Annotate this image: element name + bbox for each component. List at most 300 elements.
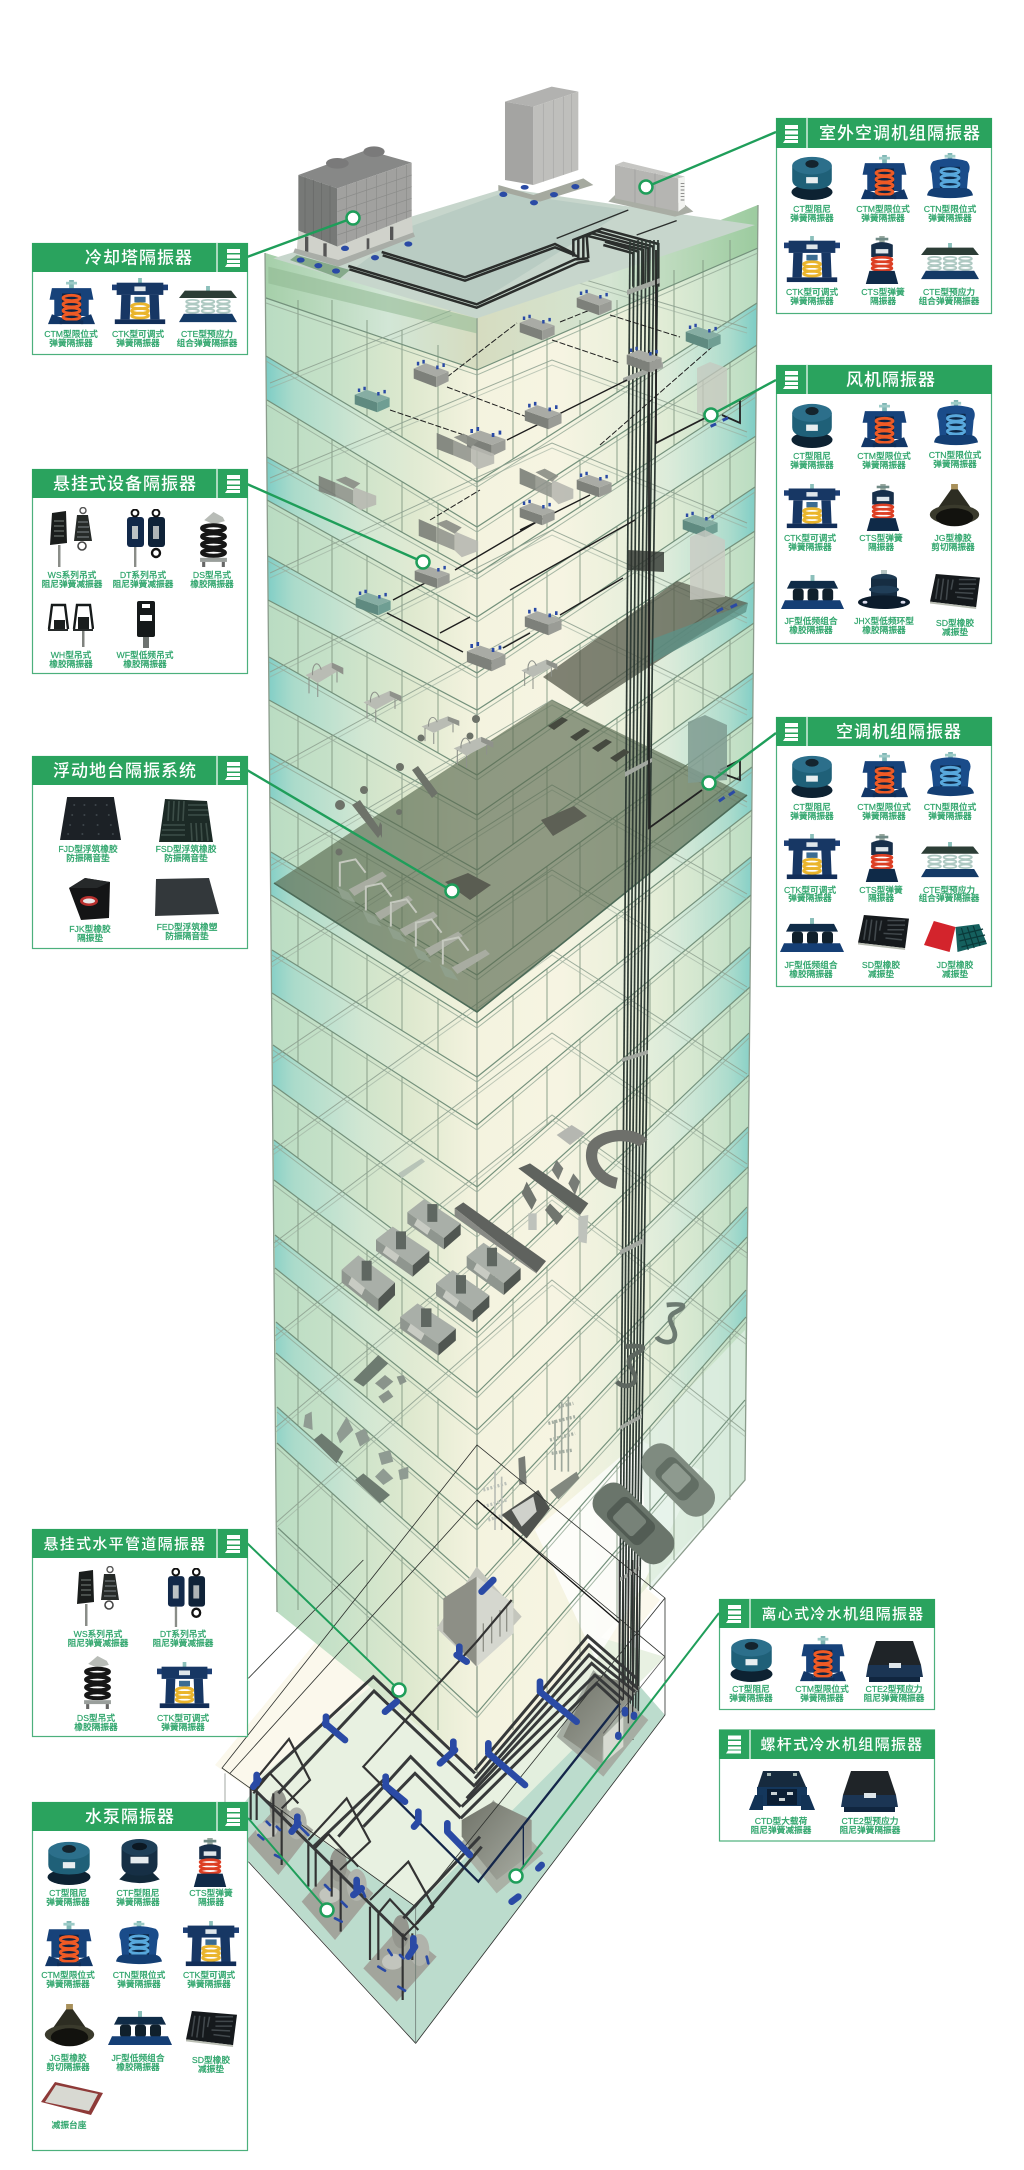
- callout line: fan: [711, 380, 776, 415]
- product: CT: CT型阻尼: [49, 1887, 87, 1898]
- product: CTE: 组合弹簧隔振器: [919, 295, 980, 306]
- product: JF: JF型低频组合: [111, 2052, 165, 2063]
- product: CTM: 弹簧隔振器: [862, 810, 906, 821]
- product: CT: CT型阻尼: [793, 801, 831, 812]
- meeting table: [518, 1160, 588, 1243]
- product: JD: [924, 921, 987, 979]
- product: SD: 减振垫: [868, 968, 894, 979]
- gym table: [445, 873, 491, 900]
- lounge group bottom: [303, 1412, 408, 1503]
- panel header: [776, 118, 992, 148]
- panel header: [32, 243, 248, 272]
- building corner and side edges: [265, 205, 758, 1773]
- panel: water pump isolators: [32, 1802, 248, 2150]
- callout dot: fan: [704, 408, 718, 422]
- cooling tower: [290, 146, 415, 278]
- product: CT: 弹簧隔振器: [46, 1896, 90, 1907]
- branch pipes to fan and air conditioning units: [649, 250, 740, 828]
- callout line: air handling unit: [709, 733, 776, 783]
- product: DT: DT系列吊式: [120, 569, 166, 580]
- product: CTM: 弹簧隔振器: [49, 337, 93, 348]
- product: JG: [930, 484, 979, 552]
- screw chiller base: [557, 1670, 648, 1777]
- product: CTE: [919, 842, 980, 903]
- heading: 螺杆式冷水机组隔振器: [760, 1736, 924, 1754]
- kitchen equipment: [319, 433, 573, 557]
- pump loop pipes: [251, 1739, 433, 2000]
- tall rooftop unit: [498, 87, 593, 205]
- callout dot: water pump: [320, 1904, 334, 1916]
- reception table: [557, 1125, 585, 1145]
- product: CTK: 弹簧隔振器: [161, 1721, 205, 1732]
- product: CTS: 隔振器: [868, 541, 894, 552]
- product: CTK: [784, 484, 840, 552]
- product: CTF: [116, 1839, 160, 1907]
- side table: [398, 1158, 425, 1178]
- callout dot: horizontal pipe: [392, 1684, 406, 1696]
- callout dot: outdoor air conditioner: [640, 180, 652, 194]
- product: CTD: 阻尼弹簧减振器: [751, 1824, 812, 1835]
- callout line: cooling tower: [247, 218, 353, 257]
- product: CTM: 弹簧隔振器: [861, 212, 905, 223]
- product: CTM: CTM型限位式: [41, 1969, 95, 1980]
- floor plate double outlines: [270, 275, 747, 1533]
- window mullions: [298, 240, 730, 1730]
- product: CTM: 弹簧隔振器: [862, 459, 906, 470]
- product: JG: JG型橡胶: [49, 2052, 87, 2063]
- panel header: [32, 1529, 248, 1558]
- product: WF: 橡胶隔振器: [123, 658, 167, 669]
- product: CTK: CTK型可调式: [183, 1969, 235, 1980]
- header icon: [783, 371, 798, 389]
- panel header: [719, 1599, 935, 1628]
- product: FJD: [58, 797, 121, 863]
- product: CT: CT型阻尼: [732, 1683, 770, 1694]
- product: CTM: CTM型限位式: [857, 801, 911, 812]
- heading: 离心式冷水机组隔振器: [761, 1606, 925, 1623]
- product: CTM: 弹簧隔振器: [46, 1978, 90, 1989]
- air handling units: [355, 290, 721, 671]
- callout dot: centrifugal chiller: [510, 1870, 522, 1882]
- callout dot: air handling unit: [702, 776, 716, 790]
- product: CTM: CTM型限位式: [857, 450, 911, 461]
- header icon: [783, 723, 798, 741]
- abstract sculpture lower: [617, 1346, 643, 1386]
- product: WS: 阻尼弹簧减振器: [42, 578, 103, 589]
- product: CTK: [784, 236, 840, 306]
- header icon: [225, 249, 240, 267]
- basement pale ceiling zone: [250, 1600, 665, 1907]
- product: WH: WH型吊式: [51, 649, 92, 660]
- basement box outlines: [222, 1445, 665, 2043]
- product: CTK: 弹簧隔振器: [790, 295, 834, 306]
- product: SD: [930, 574, 980, 637]
- product: JF: 橡胶隔振器: [789, 968, 833, 979]
- panel: floating floor system: [32, 756, 248, 948]
- product: CTE: [177, 286, 238, 348]
- product: CTK: CTK型可调式: [784, 532, 836, 543]
- header divider: [216, 1529, 218, 1558]
- product: JF: [781, 575, 844, 635]
- product: CTK: [183, 1921, 239, 1989]
- product: CT: [46, 1842, 90, 1907]
- parapet left shade: [268, 267, 477, 333]
- navy return pipe: [383, 1703, 620, 1882]
- product: FSD: [156, 799, 217, 863]
- header divider: [216, 1802, 218, 1831]
- product: CT: 弹簧隔振器: [790, 810, 834, 821]
- product: DS: DS型吊式: [77, 1712, 115, 1723]
- product: vibration isolation base: 减振台座: [52, 2119, 87, 2130]
- panel: screw chiller isolators: [719, 1730, 935, 1841]
- product: CTK: [784, 834, 840, 903]
- heading: 悬挂式设备隔振器: [53, 474, 197, 494]
- product: CTS: [189, 1838, 233, 1907]
- callout line: suspended equipment: [247, 484, 423, 562]
- callout dot: floating floor: [446, 884, 458, 898]
- heading: 冷却塔隔振器: [85, 248, 193, 268]
- product: JG: 剪切隔振器: [931, 541, 975, 552]
- product: CTK: CTK型可调式: [786, 286, 838, 297]
- upper dark machine floor plate: [543, 581, 748, 707]
- product: JF: JF型低频组合: [784, 959, 838, 970]
- centrifugal chiller base: [458, 1800, 543, 1893]
- air conditioning unit cabinet: [688, 715, 727, 783]
- product: DS: DS型吊式: [193, 569, 231, 580]
- hospital beds: [306, 660, 557, 768]
- lounge sofa lower: [353, 1355, 407, 1403]
- panel header: [776, 717, 992, 746]
- callout line: outdoor air conditioner: [646, 132, 776, 187]
- lobby stand: [502, 1456, 550, 1538]
- product: CTM: CTM型限位式: [795, 1683, 849, 1694]
- table on floating plate: [541, 806, 587, 836]
- product: JG: JG型橡胶: [934, 532, 972, 543]
- curved reception desk: [592, 1136, 643, 1183]
- suspended duct network upper floor: [390, 310, 720, 520]
- product: FSD: FSD型浮筑橡胶: [156, 843, 217, 854]
- product: CTK: CTK型可调式: [112, 328, 164, 339]
- product: CT: 弹簧隔振器: [790, 459, 834, 470]
- product: CTN: CTN型限位式: [924, 203, 977, 214]
- rooftop chilled water pipes: [348, 210, 677, 308]
- product: CTS: 隔振器: [198, 1896, 224, 1907]
- product: CTN: 弹簧隔振器: [928, 212, 972, 223]
- lower right open ground zone: [535, 1440, 700, 1660]
- product: SD: [186, 2011, 237, 2074]
- product: CTM: [857, 753, 911, 821]
- car rear: [635, 1436, 722, 1524]
- product: JF: JF型低频组合: [784, 615, 838, 626]
- product: CTS: [859, 834, 903, 903]
- glass band shading: [266, 304, 756, 1484]
- product: CTE: CTE型预应力: [923, 286, 975, 297]
- product: CTE2: CTE2型预应力: [866, 1683, 922, 1694]
- product: CTN: [113, 1921, 166, 1989]
- callout line: floating floor: [247, 770, 452, 891]
- callout dot: cooling tower: [346, 212, 360, 224]
- floating floor plate front line: [274, 795, 747, 1012]
- product: JD: 减振垫: [942, 968, 968, 979]
- panel header: [32, 756, 248, 785]
- product: WS: 阻尼弹簧减振器: [68, 1637, 129, 1648]
- product: vibration isolation base: [41, 2082, 103, 2130]
- header divider: [806, 365, 808, 394]
- panel: fan isolators: [776, 365, 992, 644]
- product: DS: 橡胶隔振器: [190, 578, 234, 589]
- product: DT: 阻尼弹簧减振器: [113, 578, 174, 589]
- header divider: [216, 469, 218, 498]
- product: CTE2: [840, 1771, 901, 1835]
- dark riser clamp: [628, 550, 664, 572]
- heading: 悬挂式水平管道隔振器: [43, 1535, 207, 1553]
- product: CTF: 弹簧隔振器: [116, 1896, 160, 1907]
- product: CTK: 弹簧隔振器: [187, 1978, 231, 1989]
- floor lines: [266, 248, 758, 1713]
- gym equipment: [335, 715, 480, 856]
- panel header: [32, 1802, 248, 1831]
- product: CT: [790, 756, 834, 821]
- upper plate teal strip: [648, 603, 748, 665]
- product: CTN: [924, 153, 977, 223]
- product: CTE2: CTE2型预应力: [842, 1815, 898, 1826]
- product: FED: 防振隔音垫: [165, 930, 209, 941]
- riser clamps: [619, 278, 663, 1582]
- blue pump isolators: [258, 1822, 428, 1991]
- header divider: [216, 756, 218, 785]
- product: JHX: JHX型低频环型: [854, 615, 914, 626]
- abstract sculpture upper: [657, 1304, 683, 1342]
- product: FJK: 隔振垫: [77, 932, 103, 943]
- product: FJD: FJD型浮筑橡胶: [58, 843, 118, 854]
- heading: 水泵隔振器: [85, 1808, 175, 1826]
- parapet band: [265, 205, 758, 370]
- product: WS: [68, 1566, 129, 1648]
- product: SD: SD型橡胶: [936, 617, 974, 628]
- product: CTN: CTN型限位式: [929, 449, 982, 460]
- product: CTS: CTS型弹簧: [189, 1887, 233, 1898]
- suspended duct network lower floors: [387, 380, 635, 652]
- bamboo planters: [483, 1397, 579, 1530]
- heading: 浮动地台隔振系统: [53, 760, 197, 780]
- panel header: [32, 469, 248, 498]
- office furniture (zoomed coordinates): [303, 1125, 722, 1571]
- product: FSD: 防振隔音垫: [164, 852, 208, 863]
- product: JF: [780, 918, 844, 979]
- product: CTN: [924, 752, 977, 821]
- floor lines double: [266, 253, 758, 1718]
- product: CTM: CTM型限位式: [856, 203, 910, 214]
- lower wall glass tint: [640, 1330, 745, 1590]
- product: DS: 橡胶隔振器: [74, 1721, 118, 1732]
- panel: suspended equipment isolators: [32, 469, 248, 674]
- panel: outdoor air conditioner isolators: [776, 118, 992, 314]
- header divider: [806, 717, 808, 746]
- header icon: [225, 762, 240, 780]
- product: CTE: 组合弹簧隔振器: [177, 337, 238, 348]
- product: SD: [858, 915, 909, 979]
- header icon: [225, 1535, 240, 1553]
- navy vertical pipe: [521, 1825, 525, 1867]
- roof structure (zoomed coordinates): [268, 87, 755, 333]
- product: JF: 橡胶隔振器: [789, 624, 833, 635]
- callout line: horizontal pipe: [247, 1543, 399, 1690]
- product: CTE2: 阻尼弹簧隔振器: [864, 1692, 925, 1703]
- product: JG: 剪切隔振器: [46, 2061, 90, 2072]
- product: FJK: [69, 878, 111, 943]
- panel: suspended horizontal pipe isolators: [32, 1529, 248, 1736]
- pump set three: [363, 1915, 437, 2002]
- product: CTK: 弹簧隔振器: [788, 892, 832, 903]
- product: CT: [790, 157, 834, 223]
- product: CTK: CTK型可调式: [157, 1712, 209, 1723]
- blue pipe hangers: [253, 1580, 634, 1957]
- product: FJD: 防振隔音垫: [66, 852, 110, 863]
- product: CTS: 隔振器: [870, 295, 896, 306]
- product: CTK: [157, 1662, 212, 1732]
- lounge and office clusters: [342, 1199, 546, 1356]
- product: CTE: CTE型预应力: [181, 328, 233, 339]
- product: CTS: CTS型弹簧: [861, 286, 905, 297]
- outdoor air conditioning unit: [608, 162, 693, 217]
- product: SD: 减振垫: [942, 626, 968, 637]
- condenser water loop: [363, 1600, 512, 1787]
- floor plate outlines: [270, 270, 747, 1528]
- product: CT: 弹簧隔振器: [729, 1692, 773, 1703]
- product: CTN: CTN型限位式: [113, 1969, 166, 1980]
- product: CTD: CTD型大载荷: [755, 1815, 808, 1826]
- product: JD: JD型橡胶: [937, 959, 974, 970]
- product: CTS: 隔振器: [868, 892, 894, 903]
- riser bottoms: [619, 1560, 637, 1737]
- product: CTN: CTN型限位式: [924, 801, 977, 812]
- product: FED: [155, 878, 219, 941]
- product: CTN: [929, 400, 982, 469]
- product: JG: [45, 2004, 94, 2072]
- product: WF: WF型低频吊式: [117, 649, 174, 660]
- basement ground floor: [222, 1500, 665, 2043]
- heading: 空调机组隔振器: [836, 722, 962, 742]
- product: DT: DT系列吊式: [160, 1628, 206, 1639]
- chilled water main pipes: [252, 1636, 638, 1940]
- product: CTK: CTK型可调式: [784, 884, 836, 895]
- product: CTE: 组合弹簧隔振器: [919, 892, 980, 903]
- product: CTS: [859, 484, 903, 552]
- illustration: isometric building cross-section: [215, 87, 758, 2043]
- product: CTM: [857, 403, 911, 470]
- floating floor plate (gym): [274, 700, 747, 1012]
- product: JF: [108, 2011, 172, 2072]
- header icon: [726, 1605, 741, 1623]
- product: SD: 减振垫: [198, 2063, 224, 2074]
- panel: cooling tower isolators: [32, 243, 248, 354]
- blue isolators on equipment floors: [710, 416, 738, 802]
- header divider: [216, 243, 218, 272]
- product: CTK: 弹簧隔振器: [788, 541, 832, 552]
- pump set one: [247, 1790, 313, 1875]
- car front: [586, 1476, 681, 1571]
- product: CT: CT型阻尼: [793, 203, 831, 214]
- header icon: [225, 475, 240, 493]
- central chiller module: [437, 1567, 522, 1667]
- product: CTS: [861, 236, 905, 306]
- product: JF: 橡胶隔振器: [116, 2061, 160, 2072]
- product: CTE: CTE型预应力: [923, 884, 975, 895]
- product: CTK: 弹簧隔振器: [116, 337, 160, 348]
- product: SD: SD型橡胶: [862, 959, 900, 970]
- product: CTM: [795, 1636, 849, 1703]
- product: CTE: [919, 243, 980, 306]
- product: FED: FED型浮筑橡塑: [157, 921, 218, 932]
- product: CTM: [44, 280, 98, 348]
- product: CTK: [112, 278, 168, 348]
- product: WH: 橡胶隔振器: [49, 658, 93, 669]
- product: DS: [190, 512, 234, 589]
- product: WH: [48, 605, 93, 669]
- product: CTN: 弹簧隔振器: [933, 458, 977, 469]
- product: WS: WS系列吊式: [74, 1628, 123, 1639]
- product: CTS: CTS型弹簧: [859, 532, 903, 543]
- ground plane cream apron: [215, 1445, 660, 1907]
- product: CTM: CTM型限位式: [44, 328, 98, 339]
- product: CTM: [41, 1921, 95, 1989]
- product: CT: CT型阻尼: [793, 450, 831, 461]
- product: CTM: 弹簧隔振器: [800, 1692, 844, 1703]
- translucent fan unit cabinet: [697, 362, 727, 413]
- product: CTE2: 阻尼弹簧隔振器: [840, 1824, 901, 1835]
- vertical risers: [619, 240, 658, 1740]
- header icon: [783, 125, 798, 143]
- product: CT: 弹簧隔振器: [790, 212, 834, 223]
- product: DT: [153, 1569, 214, 1648]
- basement plant room (zoomed coordinates): [222, 1445, 665, 2043]
- heading: 室外空调机组隔振器: [819, 123, 981, 143]
- heading: 风机隔振器: [846, 370, 936, 390]
- product: CTE2: [864, 1641, 925, 1703]
- product: SD: SD型橡胶: [192, 2054, 230, 2065]
- header divider: [749, 1599, 751, 1628]
- product: CT: [729, 1639, 773, 1703]
- callout line: centrifugal chiller: [516, 1613, 719, 1876]
- header icon: [225, 1808, 240, 1826]
- product: DT: [113, 510, 174, 589]
- panel header: [776, 365, 992, 394]
- product: CT: [790, 404, 834, 470]
- product: CTD: [749, 1771, 815, 1835]
- treadmills: [336, 859, 490, 981]
- product: CTS: CTS型弹簧: [859, 884, 903, 895]
- product: JHX: [854, 570, 914, 635]
- panel: centrifugal chiller isolators: [719, 1599, 935, 1710]
- header icon: [726, 1736, 741, 1754]
- roof deck: [273, 188, 755, 318]
- callout line: water pump: [248, 1818, 327, 1910]
- product: JHX: 橡胶隔振器: [862, 624, 906, 635]
- product: FJK: FJK型橡胶: [69, 923, 111, 934]
- translucent cabinet middle floor: [690, 530, 725, 600]
- building glass walls: [265, 205, 758, 1773]
- callout dot: suspended equipment: [416, 556, 430, 568]
- product: DT: 阻尼弹簧减振器: [153, 1637, 214, 1648]
- product: CTN: 弹簧隔振器: [928, 810, 972, 821]
- product: CTN: 弹簧隔振器: [117, 1978, 161, 1989]
- panel: air handling unit isolators: [776, 717, 992, 986]
- product: CTF: CTF型阻尼: [117, 1887, 160, 1898]
- product: CTM: [856, 155, 910, 223]
- panel header: [719, 1730, 935, 1759]
- pump set two: [302, 1848, 373, 1940]
- roof deck inner panel: [357, 193, 627, 303]
